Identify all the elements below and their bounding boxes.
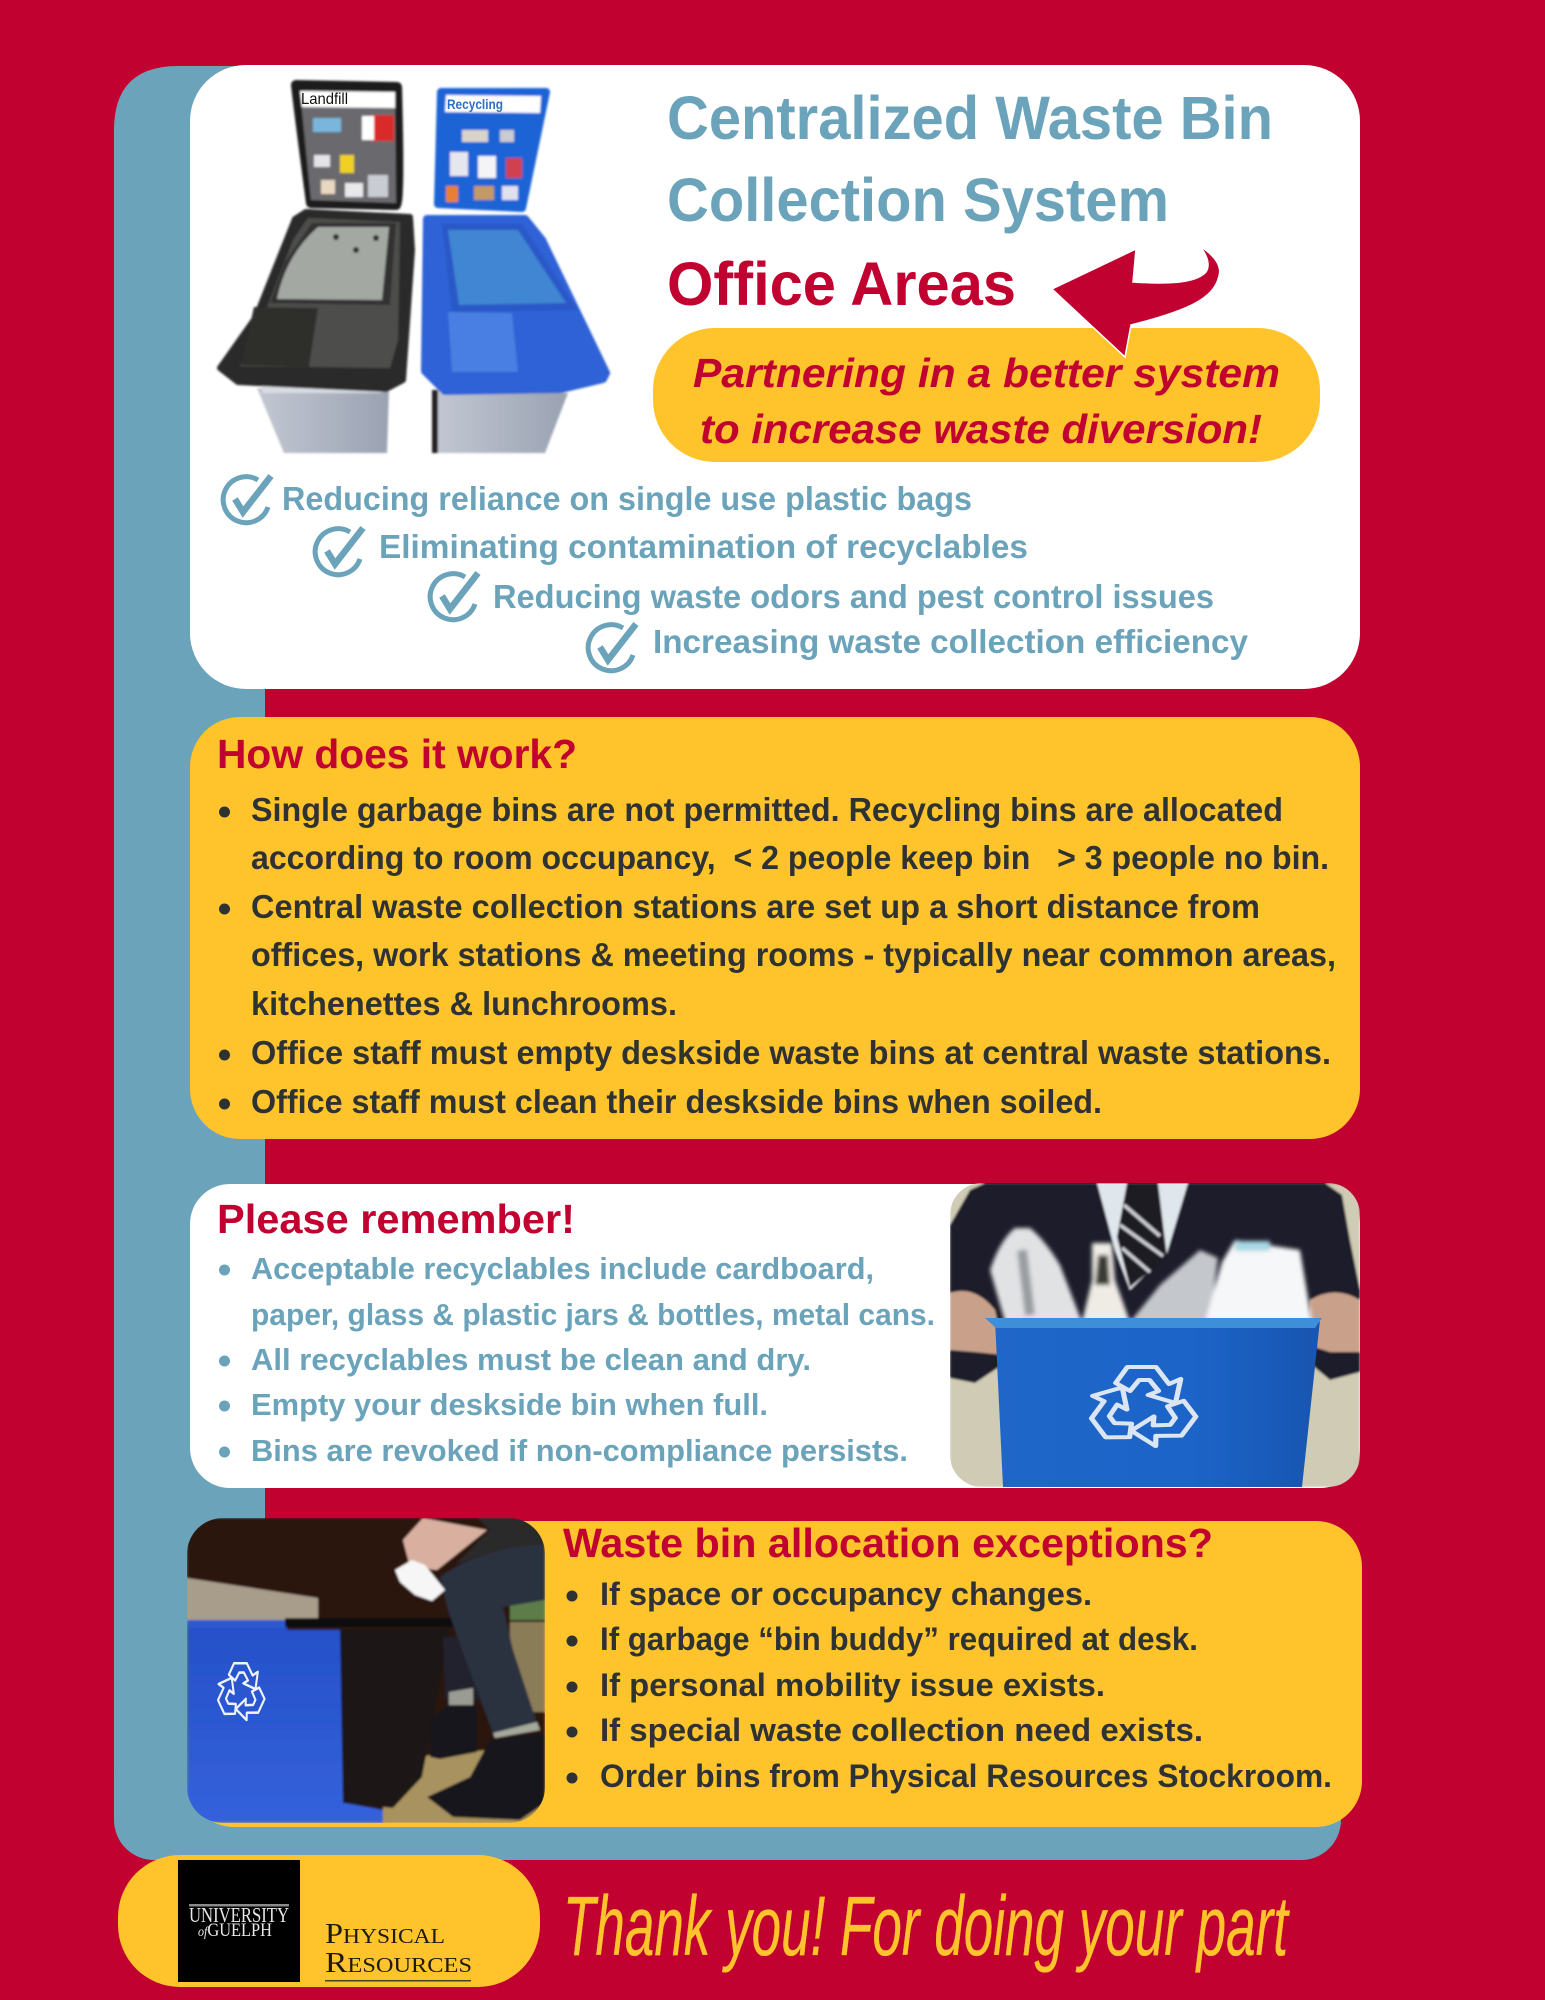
bullet list: If garbage “bin buddy” required at desk. [600,1621,1198,1657]
logo: University of Guelph: ofGUELPH [198,1920,272,1941]
logo: University of Guelph: UNIVERSITY [189,1903,289,1927]
heading: Waste bin allocation exceptions? [563,1520,1213,1566]
bullet list: All recyclables must be clean and dry. [251,1342,811,1377]
bullet list: according to room occupancy, < 2 people keep bin > 3 people no bin. [251,839,1329,876]
bullet list: If special waste collection need exists. [600,1712,1203,1748]
checklist [223,476,1249,671]
wordmark: Physical Resources [325,1918,472,1982]
panel: intro card [190,65,1360,689]
footer logo pill [118,1855,540,1987]
title: Office Areas [667,250,1016,318]
bullet list [566,1576,1332,1794]
bullet list: Bins are revoked if non-compliance persists. [251,1433,908,1468]
wordmark: Physical Resources: PHYSICAL [325,1918,445,1950]
wordmark: Physical Resources: RESOURCES [325,1947,472,1979]
bullet list: Central waste collection stations are set up a short distance from [251,888,1260,925]
bullet list: kitchenettes & lunchrooms. [251,985,677,1022]
checklist: Reducing waste odors and pest control issues [493,578,1214,615]
photo: person holding recycling bin [950,1183,1360,1487]
callout pill: Partnering in a better system [693,350,1280,396]
icon: recycling symbol [1088,1365,1198,1448]
heading: How does it work? [217,731,577,777]
bullet list [219,791,1336,1120]
bullet list: Office staff must clean their deskside bins when soiled. [251,1083,1102,1120]
photo: person dropping tissue in bin [187,1518,545,1823]
bullet list: If personal mobility issue exists. [600,1667,1105,1703]
title: Centralized Waste Bin [667,84,1273,152]
photo: landfill and recycling bins [220,85,606,453]
callout pill [653,328,1320,462]
arrow [1052,246,1220,357]
bullet list: If space or occupancy changes. [600,1576,1092,1612]
bullet list: Acceptable recyclables include cardboard, [251,1251,874,1286]
icon: check 2 [315,528,363,575]
icon: check 3 [430,573,478,620]
bullet list: Order bins from Physical Resources Stockroom. [600,1758,1332,1794]
callout pill: to increase waste diversion! [700,406,1262,452]
icon: recycling symbol [217,1662,266,1722]
bullet list: paper, glass & plastic jars & bottles, metal cans. [251,1297,935,1332]
title: Collection System [667,166,1169,234]
panel: how does it work [190,717,1360,1139]
sign label: Recycling: Recycling [447,96,503,112]
icon: check 4 [588,624,636,671]
panel: waste bin allocation exceptions [187,1518,1362,1827]
bullet list [219,1251,935,1468]
heading: Please remember! [217,1196,575,1242]
teal backing panel [114,66,1341,1860]
title [667,84,1273,318]
bullet list: offices, work stations & meeting rooms - typically near common areas, [251,936,1336,973]
logo: University of Guelph [178,1860,300,1982]
bullet list: Office staff must empty deskside waste bins at central waste stations. [251,1034,1331,1071]
icon: check 1 [223,476,271,523]
bullet list: Single garbage bins are not permitted. Recycling bins are allocated [251,791,1283,828]
bullet list: Empty your deskside bin when full. [251,1387,768,1422]
panel: please remember [190,1183,1360,1488]
sign label: Landfill: Landfill [301,91,348,108]
checklist: Eliminating contamination of recyclables [379,528,1028,565]
checklist: Reducing reliance on single use plastic bags [282,480,972,517]
checklist: Increasing waste collection efficiency [653,623,1249,660]
